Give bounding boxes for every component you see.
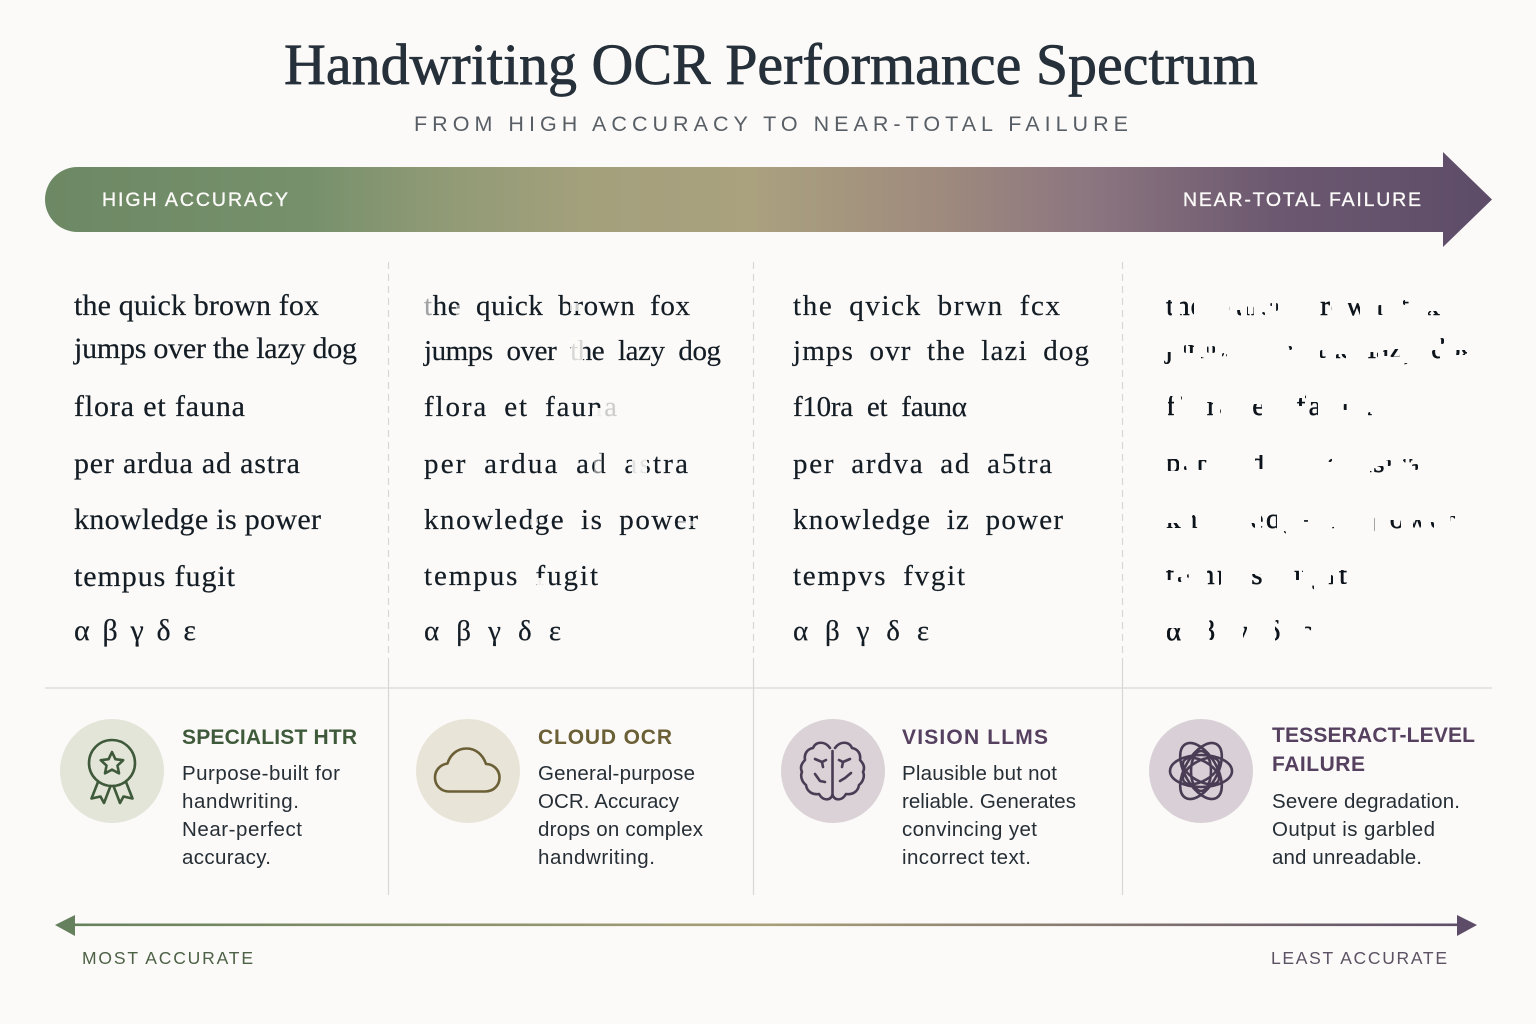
column 3: plausible but wrong sample bbox=[792, 290, 1089, 647]
description: convincing yet bbox=[902, 818, 1037, 841]
description: reliable. Generates bbox=[902, 790, 1076, 813]
column 1: clean handwriting sample: per ardua ad astra bbox=[74, 447, 300, 480]
icon: brain bbox=[781, 719, 885, 823]
column 4: severely garbled sample: the quick brown fox bbox=[1166, 290, 1440, 322]
heading: VISION LLMS bbox=[902, 726, 1048, 749]
description: Plausible but not bbox=[902, 762, 1057, 785]
label: near-total failure: NEAR-TOTAL FAILURE bbox=[1183, 189, 1421, 211]
description bbox=[1272, 790, 1460, 869]
column 4: severely garbled sample: knowledge is power bbox=[1166, 503, 1455, 535]
column 1: clean handwriting sample: the quick brown fox bbox=[74, 289, 319, 322]
column 1: clean handwriting sample: knowledge is power bbox=[74, 503, 321, 536]
panel: tesseract-level failure bbox=[1149, 719, 1475, 869]
description: OCR. Accuracy bbox=[538, 790, 680, 813]
column 4: severely garbled sample: per ardua ad astra bbox=[1166, 447, 1420, 479]
description bbox=[902, 762, 1076, 869]
label: most accurate: MOST ACCURATE bbox=[82, 948, 253, 968]
description: drops on complex bbox=[538, 818, 704, 841]
panel: cloud OCR bbox=[416, 719, 704, 869]
description bbox=[538, 762, 704, 869]
column 4: severely garbled sample: jumps over the lazy dog bbox=[1164, 333, 1475, 365]
column 4: severely garbled sample: flora et fauna bbox=[1166, 390, 1372, 422]
icon: cloud bbox=[416, 719, 520, 823]
column 4: severely garbled sample: α β γ δ ε bbox=[1166, 615, 1312, 647]
description: Output is garbled bbox=[1272, 818, 1435, 841]
column 2: slightly degraded sample: flora et fauna bbox=[424, 391, 617, 423]
label: least accurate: LEAST ACCURATE bbox=[1271, 948, 1447, 968]
description: and unreadable. bbox=[1272, 846, 1422, 869]
description: handwriting. bbox=[538, 846, 655, 869]
description: incorrect text. bbox=[902, 846, 1031, 869]
column 2: slightly degraded sample: tempus fugit bbox=[424, 560, 598, 592]
spectrum arrow banner bbox=[45, 152, 1492, 247]
description bbox=[182, 762, 340, 869]
label: high accuracy: HIGH ACCURACY bbox=[102, 189, 288, 211]
column 3: plausible but wrong sample: tempvs fvgit bbox=[793, 560, 965, 592]
column 3: plausible but wrong sample: knowledge iz power bbox=[793, 504, 1063, 536]
column 4: severely garbled sample bbox=[1164, 290, 1475, 647]
panel: vision LLMs bbox=[781, 719, 1076, 869]
title: Handwriting OCR Performance Spectrum bbox=[284, 32, 1258, 97]
column 1: clean handwriting sample: tempus fugit bbox=[74, 560, 236, 593]
description: Purpose-built for bbox=[182, 762, 340, 785]
column 3: plausible but wrong sample: the qvick brwn fcx bbox=[793, 290, 1060, 322]
column 2: slightly degraded sample: knowledge is power bbox=[424, 504, 698, 536]
description: Near-perfect bbox=[182, 818, 302, 841]
heading: CLOUD OCR bbox=[538, 726, 672, 749]
column 2: slightly degraded sample: jumps over the lazy dog bbox=[423, 335, 721, 367]
column 2: slightly degraded sample: α β γ δ ε bbox=[424, 615, 561, 647]
description: handwriting. bbox=[182, 790, 299, 813]
description: General-purpose bbox=[538, 762, 695, 785]
column 1: clean handwriting sample: flora et fauna bbox=[74, 390, 245, 423]
panel: specialist HTR bbox=[60, 719, 357, 869]
column 3: plausible but wrong sample: f10ra et faunα bbox=[793, 391, 967, 423]
column 1: clean handwriting sample: jumps over the lazy dog bbox=[73, 332, 357, 365]
column 2: slightly degraded sample: the quick brown fox bbox=[424, 290, 690, 322]
column 1: clean handwriting sample: α β γ δ ε bbox=[74, 614, 196, 647]
column 3: plausible but wrong sample: jmps ovr the lazi dog bbox=[792, 335, 1089, 367]
column 3: plausible but wrong sample: α β γ δ ε bbox=[793, 615, 929, 647]
bottom double-headed arrow bbox=[55, 915, 1477, 936]
column 2: slightly degraded sample: per ardua ad astra bbox=[424, 448, 688, 480]
description: Severe degradation. bbox=[1272, 790, 1460, 813]
heading: FAILURE bbox=[1272, 753, 1365, 776]
icon: award badge bbox=[60, 719, 164, 823]
column 3: plausible but wrong sample: per ardva ad a5tra bbox=[793, 448, 1052, 480]
subtitle: FROM HIGH ACCURACY TO NEAR-TOTAL FAILURE bbox=[414, 112, 1128, 136]
heading: TESSERACT-LEVEL bbox=[1272, 724, 1475, 747]
column 1: clean handwriting sample bbox=[73, 289, 357, 647]
column 2: slightly degraded sample bbox=[423, 290, 721, 647]
description: accuracy. bbox=[182, 846, 271, 869]
heading: SPECIALIST HTR bbox=[182, 726, 357, 749]
column 4: severely garbled sample: tempus fugit bbox=[1166, 559, 1347, 591]
icon: tangled orbits bbox=[1149, 719, 1253, 823]
heading bbox=[1272, 724, 1475, 776]
